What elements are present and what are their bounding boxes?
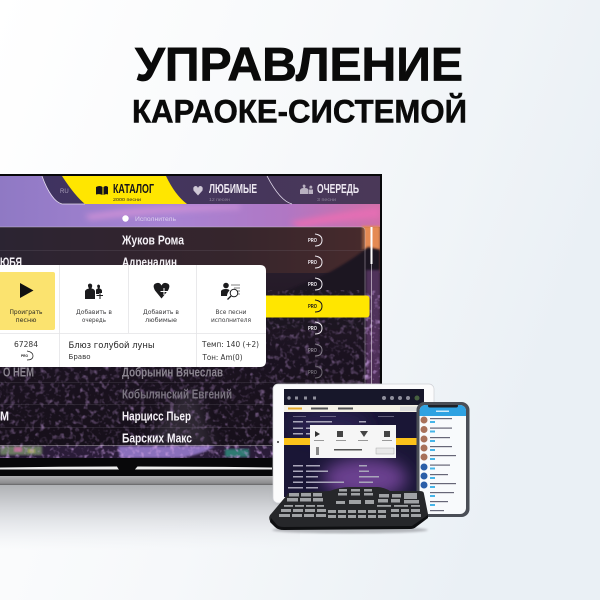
tab: catalog: 2000 песни [113,197,142,202]
tv set [0,174,382,476]
toolbar icons [287,396,420,400]
action: all artist songs [211,283,251,324]
action: play [0,272,55,330]
right edge lavender [365,269,380,384]
song rows: Жуков Рома [121,234,185,248]
scrollbar [370,227,372,384]
contact list [420,416,456,511]
action: all artist songs: Все песни [216,308,246,316]
photo: field [0,273,380,446]
pro badges: PRO [308,304,317,310]
phone [416,402,470,517]
action: add to queue: Добавить в [76,308,112,316]
title: УПРАВЛЕНИЕ [135,38,463,90]
tempo and key: Тон: Am(0) [202,353,243,362]
pro badges: PRO [308,282,317,288]
song rows [0,234,232,446]
title [132,38,467,130]
tab: catalog: КАТАЛОГ [113,182,154,196]
keypad shadow [272,526,428,534]
keypad body [269,487,428,529]
action: add to queue: очередь [82,316,106,324]
header bar [42,176,380,204]
language label: RU [60,189,69,195]
song title: Блюз голубой луны [68,341,154,351]
tab: favourites: ЛЮБИМЫЕ [209,182,257,196]
song rows: О НЕМ [3,366,34,380]
screen [0,176,380,458]
pro badges: PRO [308,348,317,354]
tab: queue [300,184,359,201]
photo: pink streaks [85,205,380,228]
tab: queue: ОЧЕРЕДЬ [317,182,359,196]
pro badges: PRO [308,370,317,376]
phone screen [420,404,466,514]
tab: catalog [62,176,187,204]
pro badges: PRO [308,238,317,244]
tab: favourites [193,184,257,201]
keys [279,489,421,518]
tv bottom highlight [0,466,272,470]
photo: lavender speckle [0,290,380,458]
photo: sky [0,176,380,227]
tablet shadow [276,490,426,504]
song rows: Кобылянский Евгений [122,388,232,402]
action: add to queue [76,284,112,324]
tablet highlighted row [284,438,424,445]
song number: 67284 [14,340,38,349]
tv shadow on surface [0,476,300,550]
tempo and key: Темп: 140 (+2) [201,340,259,349]
action: add to favourites: Добавить в [143,308,179,316]
keypad front edge [270,515,428,530]
photo: bright foreground [0,444,273,458]
song number: PRO [21,353,28,358]
tablet [273,384,434,504]
row lines [0,250,364,428]
popup card [0,265,266,367]
song rows: Адреналин [122,256,177,270]
search mode: Исполнитель [135,216,177,223]
photo: sunset [362,226,380,250]
action: add to favourites: любимые [145,316,177,324]
song rows: Барских Макс [122,432,192,446]
tablet tabs [284,405,424,412]
title: КАРАОКЕ-СИСТЕМОЙ [132,94,467,130]
list panel [0,227,365,445]
action: add to favourites [143,283,179,324]
phone body [416,402,470,517]
tablet popup [310,425,396,458]
photo: path [150,392,215,446]
song rows: Нарцисс Пьер [122,410,191,424]
tab outline [42,176,292,204]
action: all artist songs: исполнителя [211,316,251,324]
song title: Браво [68,353,90,361]
tablet rows [288,416,394,488]
tab: queue: 3 песни [317,197,337,202]
highlighted row [266,296,370,318]
search mode [122,215,177,223]
home dot [277,441,279,443]
tab: favourites: 12 песен [209,197,231,202]
pro badges [308,234,322,378]
photo: horizon band [129,227,380,273]
tablet frame [273,384,434,503]
action: play: Проиграть [10,308,43,316]
tempo and key [201,340,259,362]
keypad [269,487,428,534]
photo: hill [284,246,380,296]
pro badges: PRO [308,260,317,266]
song rows: Добрынин Вячеслав [122,366,223,380]
song number [14,340,38,360]
song rows: М [0,410,9,424]
pro badges: PRO [308,326,317,332]
tv body [0,174,382,476]
tablet screen [284,389,424,498]
song title [68,341,154,361]
song rows: ЮБЯ [0,256,22,270]
notch [428,404,458,408]
action: play: песню [16,316,37,324]
